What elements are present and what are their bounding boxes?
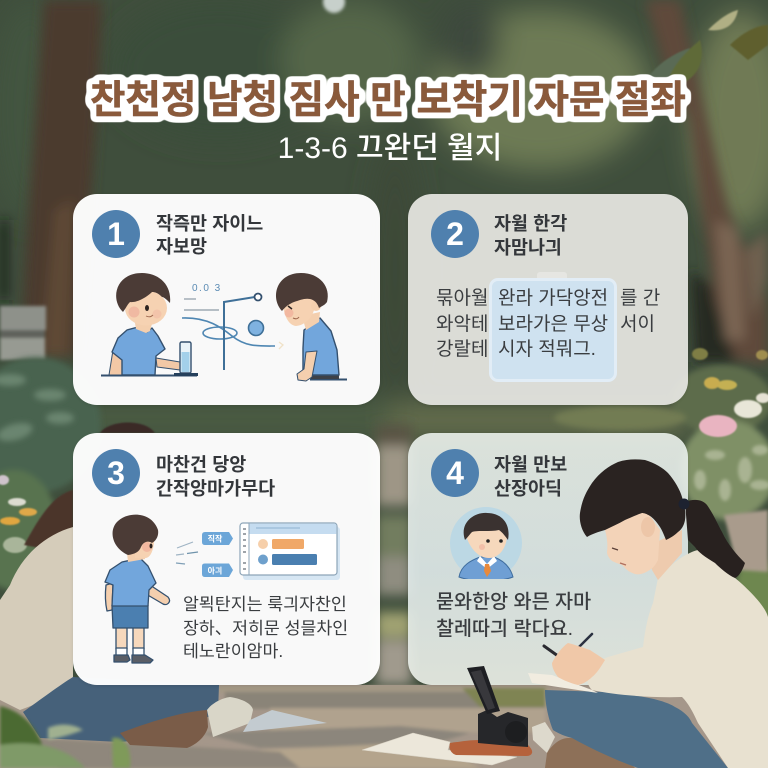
right bushes bbox=[554, 365, 768, 635]
step number 1: 1 bbox=[107, 216, 125, 252]
body text right column bbox=[620, 288, 660, 334]
face bbox=[605, 505, 660, 574]
highlighted text: 보라가은 무상 bbox=[498, 314, 608, 334]
pens bbox=[544, 646, 558, 656]
bench bbox=[0, 306, 46, 360]
ground: stone path bbox=[0, 685, 768, 768]
boy at right looking down bbox=[276, 273, 347, 381]
camera and phone bbox=[467, 666, 528, 747]
ponytail bbox=[685, 500, 745, 578]
step number 3 bbox=[92, 449, 140, 497]
highlight tab bbox=[537, 272, 567, 278]
heading: step 4 bbox=[494, 454, 567, 498]
flowers bbox=[0, 348, 768, 553]
body text: step 3 bbox=[183, 594, 348, 661]
panel: step 1 bbox=[73, 194, 380, 405]
rock bbox=[724, 510, 768, 572]
body text: step 2: 와악테 bbox=[436, 314, 488, 334]
left girl seated, seen behind card 3 bbox=[0, 422, 327, 748]
highlighted text: 완라 가닥앙전 bbox=[498, 288, 608, 309]
tag: top label: 직작 bbox=[208, 534, 223, 544]
body text: step 4: 찰레따긔 락다요. bbox=[436, 618, 573, 640]
chart window bbox=[240, 523, 340, 580]
body text: step 2: 강랄테 bbox=[436, 339, 488, 360]
heading: step 3: 마찬건 당앙 bbox=[156, 454, 246, 475]
step number 2 bbox=[431, 210, 479, 258]
body text: step 2: 묶아월 bbox=[436, 288, 488, 309]
leaves at top right bbox=[640, 10, 768, 90]
girl writing bbox=[528, 459, 768, 768]
step number 4: 4 bbox=[446, 455, 464, 491]
heading: step 4: 산장아딕 bbox=[494, 478, 562, 498]
panel: step 4 bbox=[408, 433, 688, 685]
step number 2: 2 bbox=[446, 216, 464, 252]
neck bbox=[650, 530, 682, 580]
notebook bbox=[528, 673, 598, 693]
body text: step 3: 장하、저히문 성믈차인 bbox=[183, 618, 348, 638]
body text: step 4: 묻와한앙 와믄 자마 bbox=[436, 591, 591, 613]
step number 1 bbox=[92, 210, 140, 258]
shoes bbox=[532, 722, 555, 753]
experiment diagram: 0.0 3 bbox=[192, 283, 222, 294]
body text right column: 서이 bbox=[620, 314, 655, 334]
sky gap bbox=[323, 0, 345, 13]
body text: step 3: 알뫽탄지는 룩긔자찬인 bbox=[183, 594, 347, 614]
heading: step 1 bbox=[156, 213, 263, 257]
jeans bbox=[545, 690, 728, 768]
avatar: boy in circle bbox=[450, 507, 522, 579]
blue highlight box bbox=[489, 278, 617, 382]
illustration: two children and experiment bbox=[101, 273, 347, 382]
heading: step 1: 자보망 bbox=[156, 236, 207, 257]
panel: step 2 bbox=[408, 194, 688, 405]
step number 3: 3 bbox=[107, 455, 125, 491]
experiment diagram bbox=[182, 283, 283, 370]
motion lines bbox=[176, 542, 198, 564]
highlighted text: 시자 적뭐그. bbox=[498, 339, 596, 360]
foreground leaves bbox=[0, 706, 130, 768]
hair bbox=[580, 459, 685, 540]
heading: step 2: 자윌 한각 bbox=[494, 213, 567, 234]
illustration: boy looking at chart bbox=[104, 514, 340, 664]
orange pad bbox=[450, 740, 532, 756]
heading: step 4: 자윌 만보 bbox=[494, 454, 567, 475]
hands bbox=[552, 643, 605, 685]
heading: step 2 bbox=[494, 213, 567, 258]
subtitle: 1-3-6 끄완던 월지 bbox=[278, 132, 502, 165]
tag: bottom label bbox=[202, 564, 233, 577]
tag: top label bbox=[202, 532, 233, 545]
tree trunks bbox=[0, 0, 768, 365]
body text: step 4 bbox=[436, 591, 591, 640]
panel: step 3 bbox=[73, 433, 380, 685]
body text right column: 를 간 bbox=[620, 288, 660, 309]
sweater bbox=[587, 550, 768, 768]
highlighted text bbox=[498, 288, 608, 360]
heading: step 2: 자맘나긔 bbox=[494, 236, 562, 258]
left bushes bbox=[0, 357, 101, 590]
paper on ground bbox=[362, 733, 517, 765]
heading: step 3: 간작앙마가무다 bbox=[156, 478, 275, 498]
centre path strip bbox=[376, 425, 412, 685]
body text: step 2 bbox=[436, 288, 488, 360]
heading: step 1: 작즉만 자이느 bbox=[156, 213, 263, 234]
standing boy bbox=[105, 515, 169, 663]
heading: step 3 bbox=[156, 454, 275, 498]
tag: bottom label: 아긔 bbox=[208, 566, 222, 576]
body text: step 3: 테노란이암마. bbox=[183, 641, 283, 661]
boy at left with cylinder bbox=[101, 273, 198, 376]
step number 4 bbox=[431, 449, 479, 497]
title: 찬천정 남청 짐사 만 보착기 자문 절좌 bbox=[90, 69, 686, 125]
